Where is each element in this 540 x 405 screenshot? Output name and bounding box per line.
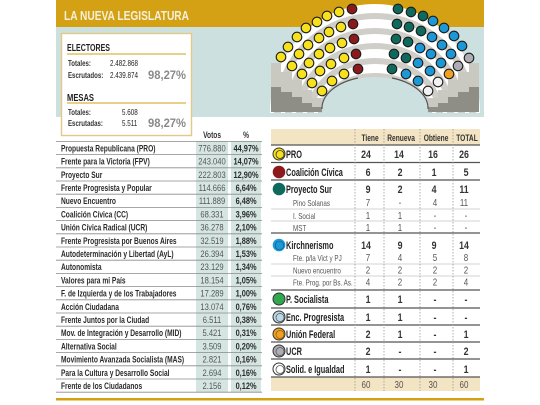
table header: TOTAL — [456, 133, 478, 143]
row: P. Socialista: - — [434, 294, 436, 306]
hemicycle seat chart — [270, 4, 480, 113]
row: Unión Federal: 2 — [366, 329, 371, 341]
mesas totales: Totales: — [68, 107, 91, 117]
row: MID — [61, 327, 257, 339]
row: P. Socialista — [273, 293, 467, 306]
row: totales — [362, 379, 468, 390]
table header: Tiene — [361, 133, 379, 143]
row: Fte. p/la Vict y PJ: 5 — [433, 252, 437, 263]
electores totales: 2.482.868 — [110, 58, 138, 68]
seats: Solidaridad e Igualdad — [423, 77, 443, 96]
mesas totales — [68, 107, 138, 117]
row: Solid. e Igualdad: - — [399, 364, 401, 376]
row: Nuevo encuentro: 2 — [433, 265, 437, 276]
row: Frente de los Ciudadanos — [61, 380, 257, 391]
row: Frente Juntos: Frente Juntos por la Ciudad — [61, 315, 149, 325]
row: Valores para mi País: 18.154 — [200, 275, 224, 286]
row: FPV: 243.040 — [198, 156, 226, 167]
row: MST: - — [465, 222, 467, 233]
row: Proyecto Sur: 2 — [398, 184, 403, 196]
row: Proyecto Sur: Proyecto Sur — [286, 184, 332, 195]
row: P. Socialista: 1 — [398, 294, 403, 306]
row: Kirchnerismo: 9 — [398, 240, 403, 252]
row: Frente Progresista por Buenos Aires: Frente Progresista por Buenos Aires — [61, 236, 177, 246]
row: Fte. Prog. por Bs. As.: 2 — [398, 277, 402, 288]
row: Proyecto Sur: 11 — [459, 184, 469, 196]
row: Kirchnerismo: 14 — [361, 240, 371, 252]
electores escrutados: 2.439.874 — [110, 70, 138, 80]
mesas escrutadas — [68, 118, 137, 128]
row: Proyecto Sur: 4 — [432, 184, 437, 196]
row: Proyecto Sur — [61, 169, 259, 180]
row: Fte. p/la Vict y PJ: Fte. p/la Vict y PJ — [293, 253, 342, 263]
row: Coalición Cívica: 1 — [432, 167, 437, 179]
row: MID: 0,31% — [236, 327, 257, 338]
seats: UCR — [453, 53, 474, 71]
row: Pino Solanas — [293, 197, 468, 208]
row: Frente Progresista por Buenos Aires: 32.519 — [200, 235, 224, 246]
total row background — [271, 377, 480, 391]
row: Alternativa Social — [61, 340, 257, 352]
electores escrutados: Escrutados: — [68, 70, 103, 80]
row: Coalición Cívica: 5 — [464, 167, 469, 179]
row: Coalición Cívica: 6 — [366, 167, 371, 179]
row: UCR — [273, 345, 469, 358]
row: Kirchnerismo: Kirchnerismo — [286, 240, 334, 251]
bottom gold rule — [56, 398, 484, 400]
row: Alternativa Social: Alternativa Social — [61, 341, 117, 352]
row: Frente Progresista y Popular: 114.666 — [199, 182, 226, 193]
column headers: Votos — [203, 130, 221, 140]
row: MID: Mov. de Integración y Desarrollo (MID) — [61, 328, 182, 339]
row: FPV: Frente para la Victoria (FPV) — [61, 156, 150, 167]
heading: mesas: MESAS — [67, 92, 94, 104]
row: UCR: Unión Cívica Radical (UCR) — [61, 222, 148, 233]
row: Nuevo Encuentro: 6,48% — [236, 195, 257, 206]
row: Kirchnerismo — [273, 239, 469, 252]
column headers: % — [243, 130, 250, 140]
row: CC: Coalición Cívica (CC) — [61, 209, 128, 220]
row: Alternativa Social: 3.509 — [203, 341, 222, 352]
row: Fte. p/la Vict y PJ — [293, 252, 468, 263]
panel: electores y mesas — [62, 34, 192, 136]
row: Fte. Prog. por Bs. As.: Fte. Prog. por Bs. As. — [293, 278, 353, 288]
teal backdrop — [56, 27, 484, 117]
row: Fte. Prog. por Bs. As. — [293, 277, 468, 288]
row: UCR: 2 — [366, 346, 371, 358]
row: Unión Federal: 1 — [464, 329, 469, 341]
row: P. Socialista: - — [465, 294, 467, 306]
row: Pino Solanas: 7 — [366, 197, 370, 208]
row: Proyecto Sur: 9 — [366, 184, 371, 196]
seats: PRO — [276, 7, 349, 96]
row: Unión Federal: Unión Federal — [286, 329, 335, 340]
column headers — [203, 130, 250, 140]
row: Pino Solanas: 4 — [433, 197, 437, 208]
table: votos por lista — [56, 130, 262, 392]
row: F. de Izquierda — [61, 288, 257, 299]
row: I. Social: - — [434, 210, 436, 221]
row: Fte. p/la Vict y PJ: 8 — [464, 252, 468, 263]
row: Nuevo Encuentro: 111.889 — [199, 195, 225, 206]
row: CC — [61, 208, 257, 220]
row: PRO: Propuesta Republicana (PRO) — [61, 143, 156, 154]
electores escrutados — [68, 70, 138, 80]
row: AyL — [61, 248, 257, 259]
row: Proyecto Sur — [273, 183, 469, 196]
row: Frente Progresista y Popular: 6,64% — [236, 182, 257, 193]
row: PRO: PRO — [286, 149, 302, 160]
row: Acción Ciudadana: 13.074 — [200, 301, 224, 312]
row: UCR: - — [434, 346, 436, 358]
row: Valores para mi País: Valores para mi País — [61, 275, 126, 286]
row: F. de Izquierda: F. de Izquierda y de los Trabajadores — [61, 288, 177, 299]
row: Pino Solanas: - — [399, 197, 401, 208]
row: Enc. Progresista: 1 — [366, 312, 371, 324]
row: CC: 68.331 — [200, 209, 224, 220]
row: Frente Juntos: 6.511 — [203, 314, 221, 325]
row: PRO — [61, 142, 259, 154]
row: Enc. Progresista — [273, 311, 467, 324]
row: Enc. Progresista: 1 — [398, 312, 403, 324]
electores porcentaje: 98,27% — [148, 68, 186, 82]
row: totales: 60 — [460, 379, 468, 390]
row: MST: 1 — [398, 222, 402, 233]
row: Frente Progresista y Popular: Frente Progresista y Popular — [61, 183, 152, 193]
row: Acción Ciudadana: 0,76% — [236, 301, 257, 312]
row: Autonomista: Autonomista — [61, 262, 102, 273]
row: P. Socialista: P. Socialista — [286, 294, 329, 305]
row: MST — [293, 222, 467, 233]
row: Autonomista — [61, 261, 257, 273]
row: I. Social: I. Social — [293, 211, 316, 221]
row: Proyecto Sur: Proyecto Sur — [61, 170, 103, 180]
row: Valores para mi País: 1,05% — [236, 274, 257, 286]
row: MST: 1 — [366, 222, 370, 233]
row: Pino Solanas: Pino Solanas — [293, 198, 330, 208]
row: AyL: 1,53% — [236, 248, 257, 259]
row: Fte. Prog. por Bs. As.: 2 — [433, 277, 437, 288]
row: Para la Cultura: 2.694 — [203, 367, 222, 378]
row: Frente Juntos: 0,38% — [236, 314, 257, 325]
row: MID: 5.421 — [203, 327, 222, 338]
row: Nuevo encuentro: 2 — [464, 265, 468, 276]
row: AyL: Autodeterminación y Libertad (AyL) — [61, 249, 174, 259]
row: AyL: 26.394 — [200, 248, 224, 259]
row: MAS: 0,16% — [236, 354, 257, 365]
row: Para la Cultura: 0,16% — [236, 367, 257, 378]
row: Nuevo encuentro: 2 — [366, 265, 370, 276]
seats: Kirchnerismo — [401, 16, 467, 86]
row: Para la Cultura: Para la Cultura y Desarrollo Social — [61, 368, 170, 378]
row: Solid. e Igualdad: - — [434, 364, 436, 376]
row: Acción Ciudadana: Acción Ciudadana — [61, 302, 119, 312]
row: CC: 3,96% — [236, 208, 257, 220]
row: Coalición Cívica: 2 — [398, 167, 403, 179]
row: Frente de los Ciudadanos: 0,12% — [236, 380, 257, 391]
steps — [270, 4, 480, 113]
mesas porcentaje: 98,27% — [148, 116, 186, 130]
column shading — [196, 141, 261, 392]
row: Frente Juntos — [61, 314, 257, 325]
row: PRO — [273, 148, 469, 161]
row: UCR — [61, 222, 257, 233]
electores totales — [68, 58, 138, 68]
row: Nuevo encuentro: Nuevo encuentro — [293, 266, 341, 276]
row: Kirchnerismo: 9 — [432, 240, 437, 252]
row: MAS: 2.821 — [203, 354, 222, 365]
row: P. Socialista: 1 — [366, 294, 371, 306]
header band — [56, 0, 484, 27]
row: Frente de los Ciudadanos: Frente de los Ciudadanos — [61, 381, 143, 391]
seat: Unión Federal — [444, 69, 454, 79]
row: Proyecto Sur: 222.803 — [198, 169, 226, 180]
row: Autonomista: 1,34% — [236, 261, 257, 272]
row: Enc. Progresista: - — [465, 312, 467, 324]
heading: electores: ELECTORES — [67, 42, 110, 54]
row: F. de Izquierda: 17.289 — [200, 288, 224, 299]
row: totales: 30 — [395, 379, 403, 390]
row: Nuevo encuentro: 2 — [398, 265, 402, 276]
row: PRO: 14 — [394, 149, 404, 161]
row: Solid. e Igualdad: 1 — [464, 364, 469, 376]
row: Fte. Prog. por Bs. As.: 4 — [464, 277, 468, 288]
row: I. Social: 1 — [366, 210, 370, 221]
row: Pino Solanas: 11 — [460, 197, 468, 208]
row: UCR: 2,10% — [236, 222, 257, 233]
row: FPV — [61, 156, 259, 167]
table header: Renueva — [387, 133, 415, 143]
row: PRO: 776.880 — [198, 143, 226, 154]
row: PRO: 44,97% — [234, 142, 259, 154]
row: Enc. Progresista: Enc. Progresista — [286, 312, 345, 323]
row: I. Social — [293, 210, 467, 221]
row: UCR: - — [399, 346, 401, 358]
row: Kirchnerismo: 14 — [459, 240, 469, 252]
row: Acción Ciudadana — [61, 301, 257, 312]
row: Frente de los Ciudadanos: 2.156 — [203, 380, 222, 391]
row: Fte. p/la Vict y PJ: 4 — [398, 252, 402, 263]
row: Para la Cultura — [61, 367, 257, 378]
row: MAS: Movimiento Avanzada Socialista (MAS) — [61, 354, 184, 365]
row: totales: 30 — [429, 379, 437, 390]
row: Solid. e Igualdad: 1 — [366, 364, 371, 376]
row: Proyecto Sur: 12,90% — [234, 169, 259, 180]
electores totales: Totales: — [68, 58, 91, 68]
row: Frente Progresista por Buenos Aires: 1,88% — [236, 235, 257, 246]
row: Frente Progresista y Popular — [61, 182, 257, 193]
row: MST: MST — [293, 223, 307, 233]
row: MAS — [61, 354, 257, 365]
row: Unión Federal: 1 — [398, 329, 403, 341]
mesas escrutadas: 5.511 — [122, 118, 137, 128]
row: Alternativa Social: 0,20% — [236, 340, 257, 352]
row: MST: - — [434, 222, 436, 233]
row: Autonomista: 23.129 — [200, 261, 224, 272]
row: Unión Federal — [273, 328, 469, 341]
table header — [271, 129, 480, 145]
mesas totales: 5.608 — [122, 107, 138, 117]
row: PRO: 26 — [459, 149, 469, 161]
row: Frente Progresista por Buenos Aires — [61, 235, 257, 246]
row: Fte. p/la Vict y PJ: 7 — [366, 252, 370, 263]
seats: Coalición Cívica — [347, 4, 363, 74]
row: Fte. Prog. por Bs. As.: 4 — [366, 277, 370, 288]
table header: Obtiene — [424, 133, 449, 143]
row: Solid. e Igualdad — [273, 363, 469, 376]
title: LA NUEVA LEGISLATURA — [64, 8, 189, 23]
seats: Proyecto Sur — [387, 4, 428, 74]
mesas escrutadas: Escrutadas: — [68, 118, 103, 128]
row: UCR: 36.278 — [200, 222, 224, 233]
row: Enc. Progresista: - — [434, 312, 436, 324]
row: Nuevo Encuentro: Nuevo Encuentro — [61, 196, 116, 207]
row: PRO: 16 — [428, 149, 438, 161]
row: FPV: 14,07% — [234, 156, 259, 167]
row: Coalición Cívica — [273, 166, 469, 179]
row: totales: 60 — [362, 379, 370, 390]
row: Unión Federal: - — [434, 329, 436, 341]
row: UCR: 2 — [464, 346, 469, 358]
row: UCR: UCR — [286, 346, 302, 357]
row: F. de Izquierda: 1,00% — [236, 288, 257, 299]
row: Valores para mi País — [61, 274, 257, 286]
table: bancas por fuerza — [271, 129, 480, 391]
row: PRO: 24 — [361, 149, 371, 161]
row: I. Social: 1 — [398, 210, 402, 221]
row: Nuevo Encuentro — [61, 195, 257, 207]
row: Solid. e Igualdad: Solid. e Igualdad — [286, 364, 345, 375]
row: I. Social: - — [465, 210, 467, 221]
row: Nuevo encuentro — [293, 265, 468, 276]
row: Coalición Cívica: Coalición Cívica — [286, 167, 344, 178]
